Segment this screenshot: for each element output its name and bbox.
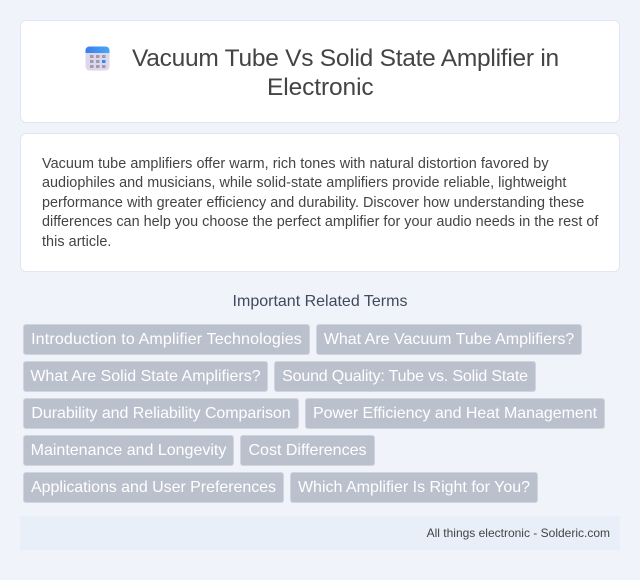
title: Electronic xyxy=(267,74,374,101)
title xyxy=(132,45,559,101)
intro text: Vacuum tube amplifiers offer warm, rich tones with natural distortion favored by xyxy=(42,156,549,172)
icon: calendar xyxy=(86,46,110,70)
tag: Maintenance and Longevity xyxy=(31,442,226,459)
intro text xyxy=(42,156,598,250)
tag: Durability and Reliability Comparison xyxy=(31,405,291,422)
intro text: audiophiles and musicians, while solid-state amplifiers provide reliable, lightweight xyxy=(42,175,566,191)
tag xyxy=(23,472,284,503)
intro panel xyxy=(20,133,620,272)
header card xyxy=(20,20,620,123)
tag xyxy=(23,324,310,355)
tag xyxy=(290,472,538,503)
title: Vacuum Tube Vs Solid State Amplifier in xyxy=(132,45,559,72)
footer text: All things electronic - Solderic.com xyxy=(427,526,610,540)
tag: What Are Vacuum Tube Amplifiers? xyxy=(324,331,574,348)
tag xyxy=(23,435,234,466)
footer xyxy=(20,516,620,550)
tag: Applications and User Preferences xyxy=(31,479,276,496)
intro text: performance with greater efficiency and durability. Discover how understanding these xyxy=(42,195,584,211)
tag: Introduction to Amplifier Technologies xyxy=(31,331,302,348)
tag list xyxy=(23,324,605,503)
tag xyxy=(240,435,375,466)
tag: Cost Differences xyxy=(248,442,366,459)
tag: Which Amplifier Is Right for You? xyxy=(298,479,530,496)
tag xyxy=(274,361,536,392)
heading: important related terms: Important Related Terms xyxy=(233,293,407,310)
tag xyxy=(23,398,299,429)
tag xyxy=(316,324,582,355)
tag xyxy=(23,361,268,392)
tag xyxy=(305,398,605,429)
intro text: differences can help you choose the perfect amplifier for your audio needs in the rest of xyxy=(42,214,598,230)
tag: Power Efficiency and Heat Management xyxy=(313,405,597,422)
intro text: this article. xyxy=(42,234,111,250)
tag: What Are Solid State Amplifiers? xyxy=(30,368,261,385)
tag: Sound Quality: Tube vs. Solid State xyxy=(282,368,528,385)
